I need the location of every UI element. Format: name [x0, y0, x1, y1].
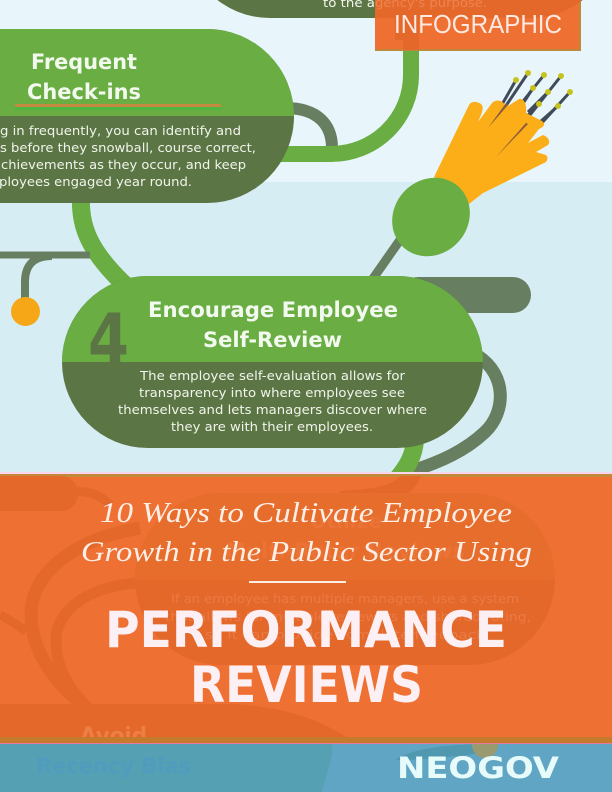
step number 4: 4	[88, 299, 129, 381]
green bulb	[376, 162, 486, 272]
heading: frequent check-ins: Check-ins	[27, 80, 141, 104]
banner subtitle: Growth in the Public Sector Using	[81, 537, 532, 568]
filaments	[495, 73, 570, 125]
ghost text: recency bias: Recency Bias	[36, 754, 191, 778]
heading: frequent check-ins	[27, 50, 141, 104]
heading: encourage employee self-review	[148, 298, 398, 352]
heading: encourage employee self-review: Encourage Employee	[148, 298, 398, 322]
top pill and cut-off text	[184, 0, 612, 18]
ghost text behind banner: Utilize	[310, 509, 382, 533]
body text: encourage employee self-review: themselves and lets managers discover where	[118, 403, 427, 417]
ghost text behind banner: If an employee has multiple managers, use a system	[171, 592, 519, 606]
orange node	[11, 297, 40, 326]
icon: flower bulb with orange fan	[376, 70, 573, 272]
banner subtitle	[81, 498, 532, 568]
logo: neogov: NEOGOV	[397, 751, 560, 785]
body text: encourage employee self-review: they are with their employees.	[171, 420, 373, 434]
heading: encourage employee self-review: Self-Review	[203, 328, 342, 352]
ghost text behind banner	[80, 509, 531, 749]
body text: frequent check-ins: chievements as they occur, and keep	[1, 158, 246, 172]
ghost text behind banner: Multi-Rater Reviews	[225, 539, 465, 563]
connector tubes	[0, 0, 500, 478]
ghost text behind banner: so it can provide complete feedback.	[205, 628, 490, 642]
banner title: PERFORMANCE	[105, 601, 507, 659]
body text: frequent check-ins	[0, 124, 256, 189]
footer band	[0, 743, 612, 792]
body text: frequent check-ins: ployees engaged year round.	[0, 175, 192, 189]
fan slits	[488, 103, 528, 157]
ghost shapes behind banner	[0, 476, 555, 737]
heading underline	[15, 104, 221, 110]
infographic tag: INFOGRAPHIC	[394, 9, 562, 39]
panel: frequent check-ins	[0, 29, 294, 203]
infographic tag	[375, 0, 581, 51]
heading: frequent check-ins: Frequent	[31, 50, 137, 74]
grey end cap bar	[400, 277, 531, 313]
body text: encourage employee self-review: The employee self-evaluation allows for	[139, 369, 406, 383]
body text: encourage employee self-review: transparency into where employees see	[139, 386, 405, 400]
filament tips	[513, 70, 573, 109]
banner divider	[249, 581, 346, 583]
body text: frequent check-ins: g in frequently, you can identify and	[0, 124, 241, 138]
background	[0, 0, 612, 474]
orange fan	[434, 99, 549, 204]
banner title: REVIEWS	[190, 656, 423, 714]
ghost text behind banner: Avoid	[80, 724, 147, 749]
body text: encourage employee self-review	[118, 369, 427, 434]
banner title	[105, 601, 507, 714]
panel: orange title banner	[0, 465, 612, 760]
banner subtitle: 10 Ways to Cultivate Employee	[100, 498, 512, 529]
body text: frequent check-ins: s before they snowball, course correct,	[0, 141, 256, 155]
panel: encourage employee self-review	[62, 276, 483, 448]
ghost text behind banner: that allows for multiple reviewers and shared rating,	[165, 610, 531, 624]
